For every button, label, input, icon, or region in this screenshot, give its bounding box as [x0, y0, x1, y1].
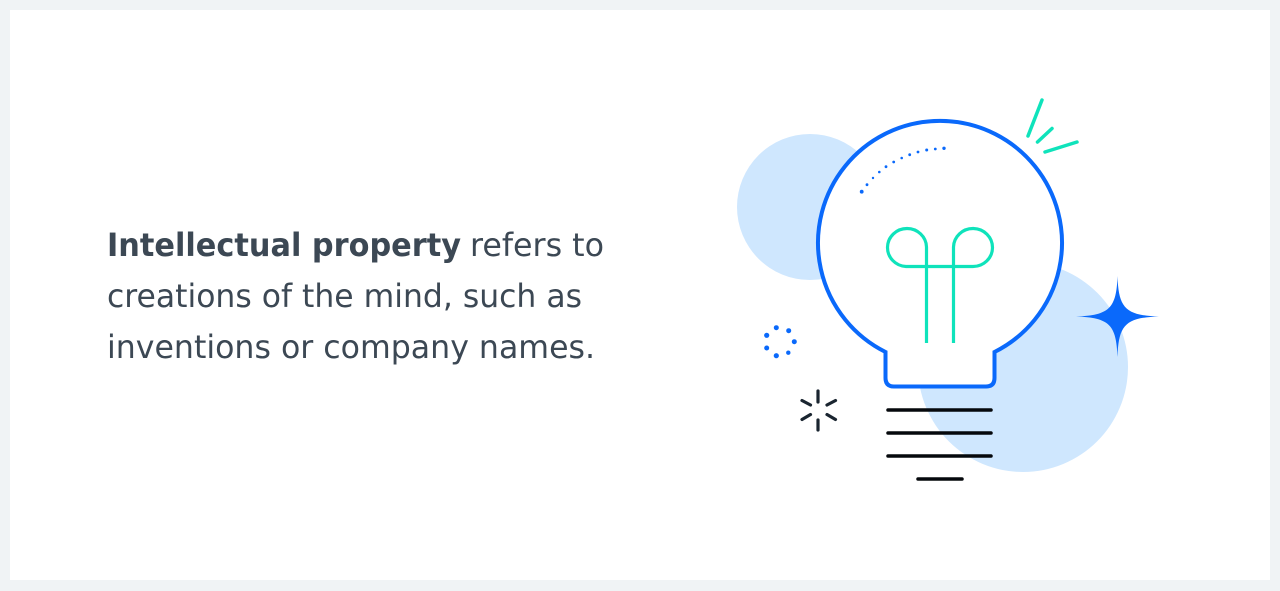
filament — [888, 228, 992, 343]
line 2: creations of the mind, such as — [107, 277, 582, 315]
dotted highlight arc — [860, 147, 946, 194]
bulb outline — [818, 121, 1062, 386]
text block: definition — [107, 226, 604, 366]
dotted circle — [764, 325, 797, 358]
bold term: Intellectual property — [107, 226, 461, 264]
illustration: light bulb — [737, 100, 1159, 479]
line 3: inventions or company names. — [107, 328, 595, 366]
four-point star — [1076, 276, 1159, 357]
line 1 remainder: refers to — [470, 226, 604, 264]
background circle: right — [918, 262, 1128, 472]
dark sparkle — [802, 391, 836, 430]
background circle: left — [737, 134, 883, 280]
green rays — [1028, 100, 1077, 152]
bulb base lines — [888, 410, 991, 479]
